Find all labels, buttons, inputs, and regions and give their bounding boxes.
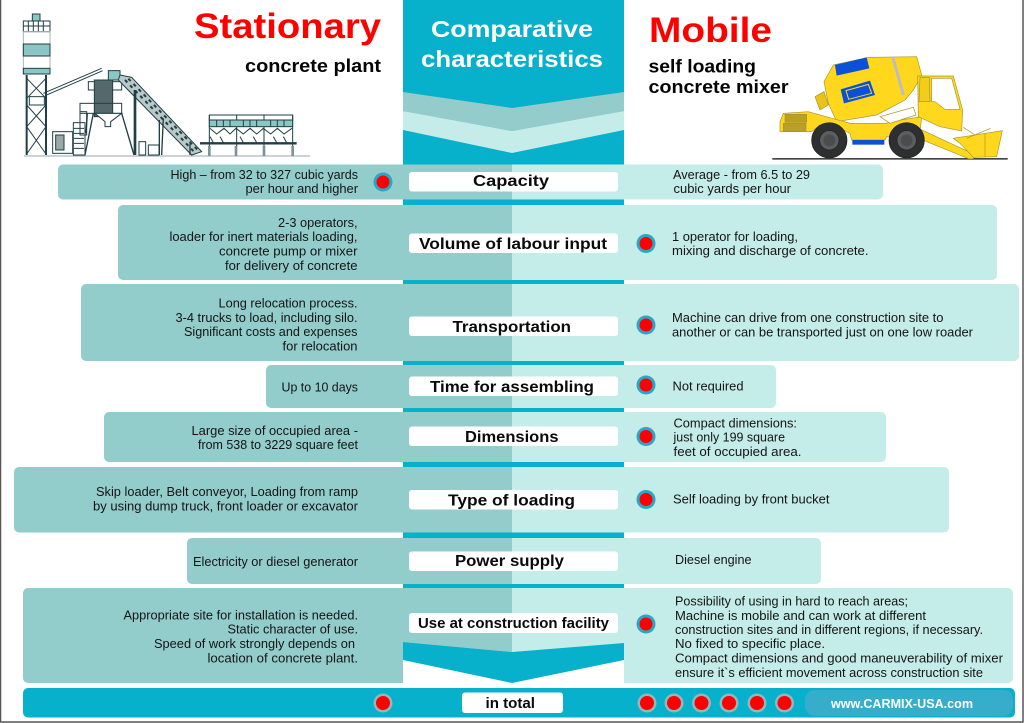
left text: labour: 2-3 operators, [278,215,358,230]
left text: facility: Speed of work strongly depends on [154,636,355,651]
arrow: down to total [403,642,624,683]
right text: capacity: Average - from 6.5 to 29 [673,167,810,182]
left text: labour: for delivery of concrete [225,258,358,273]
left text: power: Electricity or diesel generator [193,554,359,569]
label: transportation [409,316,618,336]
score dot: loading mobile [636,490,656,509]
left text: capacity [170,167,359,196]
row: dimensions [104,412,886,462]
heading: mobile self loading concrete mixer [648,11,788,97]
label: in total [462,692,563,713]
left text: facility: location of concrete plant. [208,650,358,666]
right text: facility: construction sites and in different regions, if necessary. [675,622,983,637]
label: transportation: Transportation [452,319,571,336]
right text: labour [672,229,868,258]
label: time for assembling [409,376,618,396]
left text: loading: Skip loader, Belt conveyor, Loading from ramp [96,484,358,499]
label: power supply [409,552,618,571]
left text: transportation [176,296,358,354]
row: volume of labour input [118,205,997,280]
label: type of loading [409,490,618,510]
left text: capacity: High – from 32 to 327 cubic yards [170,167,358,182]
label: power supply: Power supply [455,553,564,570]
score dot: capacity stationary [374,172,392,192]
right text: labour: 1 operator for loading, [672,229,798,244]
score dot: facility mobile [636,614,656,634]
left text: facility [124,608,358,666]
heading: comparative characteristics: Comparative [431,16,593,42]
right text: facility: ensure it`s efficient movement across construction site [675,665,983,680]
illustration: yellow self loading concrete mixer [772,57,1008,160]
right text: loading: Self loading by front bucket [673,492,830,506]
left text: transportation: Long relocation process. [218,296,358,310]
left text: dimensions [192,423,358,452]
total dots: stationary [374,694,392,712]
row: capacity [58,164,883,200]
label: type of loading: Type of loading [448,492,575,510]
score dot: transportation mobile [636,316,656,334]
total bar [23,688,1015,718]
left text: dimensions: Large size of occupied area - [192,423,358,438]
label: dimensions: Dimensions [465,429,558,446]
left text: transportation: Significant costs and expenses [184,324,358,339]
score dot: assembling mobile [636,376,656,394]
right text: dimensions: Compact dimensions: [674,416,797,430]
left text: facility: Appropriate site for installation is needed. [124,608,358,622]
right text: capacity [673,167,810,196]
left text: assembling: Up to 10 days [282,380,358,394]
label: use at construction facility: Use at construction facility [418,615,610,632]
illustration: stationary concrete plant [23,14,310,156]
left text: labour [170,215,358,273]
row: time for assembling [266,365,776,408]
row: type of loading [14,467,949,532]
right text: dimensions: just only 199 square [673,430,785,444]
heading: comparative characteristics [421,16,603,72]
row: power supply [187,538,821,584]
row: use at construction facility [23,588,1013,683]
website pill: www.CARMIX-USA.com [830,696,973,711]
right text: facility: No fixed to specific place. [675,636,825,651]
score dot: labour mobile [636,234,656,253]
right text: labour: mixing and discharge of concrete. [672,243,868,258]
heading: comparative characteristics: characteristics [421,46,603,72]
right text: facility: Compact dimensions and good maneuverability of mixer [675,650,1004,666]
left text: facility: Static character of use. [228,622,358,636]
heading: mobile self loading concrete mixer: concrete mixer [648,76,788,97]
total dots: mobile [638,694,794,712]
right text: dimensions: feet of occupied area. [674,444,802,459]
heading: stationary concrete plant [194,7,382,76]
left text: loading [93,484,359,514]
heading: stationary concrete plant: concrete plant [245,55,381,76]
score dot: dimensions mobile [636,427,656,446]
heading: mobile self loading concrete mixer: Mobile [649,11,772,50]
heading: stationary concrete plant: Stationary [194,7,382,46]
left text: loading: by using dump truck, front loader or excavator [93,498,359,514]
right text: transportation: another or can be transported just on one low roader [672,324,974,340]
right text: power: Diesel engine [675,552,752,567]
left text: transportation: 3-4 trucks to load, including silo. [176,310,358,325]
right text: capacity: cubic yards per hour [674,181,792,196]
right text: facility: Possibility of using in hard to reach areas; [675,594,908,608]
right text: facility [675,594,1004,680]
label: capacity [409,172,618,192]
row: transportation [81,284,1019,361]
left text: capacity: per hour and higher [246,181,359,196]
label: volume of labour input: Volume of labour input [419,236,607,253]
label: volume of labour input [409,234,618,253]
label: in total: in total [486,695,535,712]
right text: dimensions [673,416,802,459]
heading: mobile self loading concrete mixer: self loading [648,56,756,76]
center column: comparative characteristics header [403,0,624,590]
right text: facility: Machine is mobile and can work at different [675,608,926,623]
left text: dimensions: from 538 to 3229 square feet [198,437,358,452]
right text: transportation [672,310,974,340]
left text: transportation: for relocation [282,338,358,354]
label: capacity: Capacity [473,173,549,190]
right text: assembling: Not required [672,378,744,394]
label: dimensions [409,426,618,446]
left text: labour: loader for inert materials loading, [170,229,358,244]
label: time for assembling: Time for assembling [430,379,594,396]
website pill [805,690,1013,716]
left text: labour: concrete pump or mixer [219,244,358,258]
right text: transportation: Machine can drive from one construction site to [672,310,944,325]
